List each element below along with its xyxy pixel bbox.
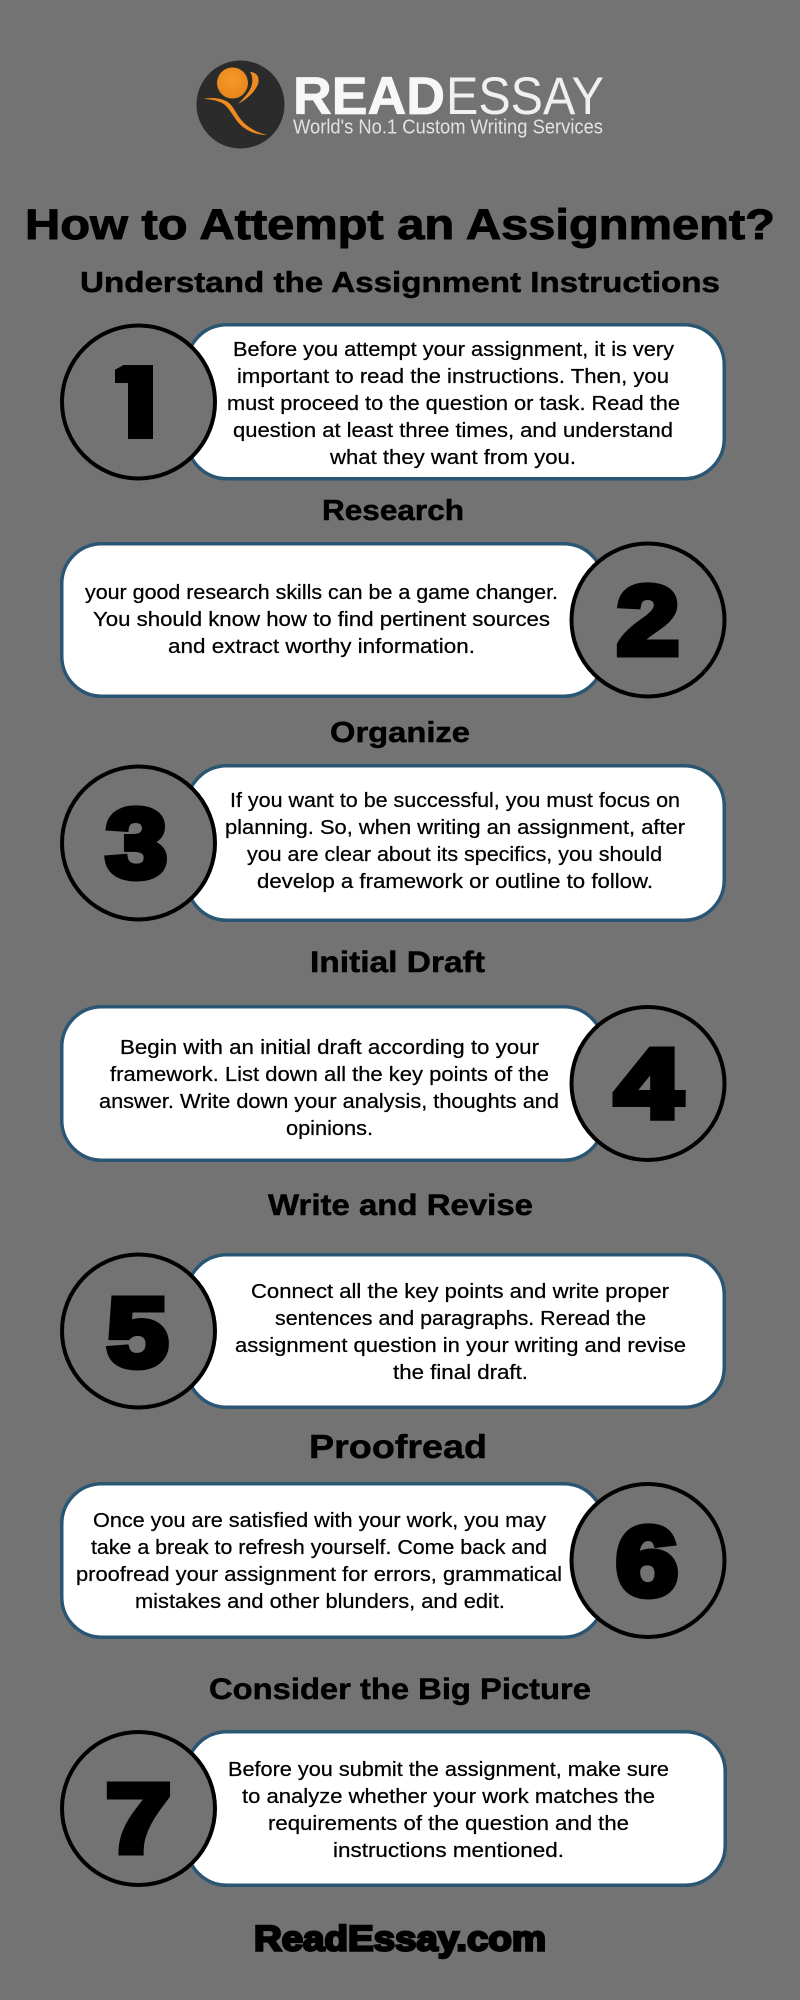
text panel 6: mistakes and other blunders, and edit.	[135, 1591, 505, 1613]
panel: step 3	[62, 766, 724, 920]
logo tagline: World's No.1 Custom Writing Services	[293, 116, 603, 138]
text panel 3: develop a framework or outline to follow.	[257, 871, 653, 893]
panel: step 6	[62, 1484, 724, 1637]
text panel 7: Before you submit the assignment, make sure	[228, 1759, 669, 1781]
logo wordmark: READ	[293, 67, 445, 126]
number badge 3: 3	[106, 789, 167, 898]
text panel 6: take a break to refresh yourself. Come back and	[91, 1537, 547, 1559]
text panel 2	[62, 544, 604, 696]
title: How to Attempt an Assignment?	[25, 201, 775, 249]
text panel 2: You should know how to find pertinent sources	[93, 609, 550, 631]
panel: step 5	[62, 1254, 724, 1408]
text panel 6	[62, 1484, 604, 1637]
number badge 2	[572, 544, 724, 696]
text panel 3: you are clear about its specifics, you should	[247, 844, 662, 866]
number badge 4: 4	[615, 1029, 682, 1138]
heading: step 2: Research	[322, 495, 464, 527]
number badge 5: 5	[107, 1278, 168, 1387]
text panel 1: must proceed to the question or task. Read the	[227, 393, 680, 415]
text panel 4: framework. List down all the key points of the	[110, 1064, 549, 1086]
text panel 2: and extract worthy information.	[168, 636, 475, 658]
text panel 5: Connect all the key points and write proper	[251, 1281, 669, 1303]
panel: step 4	[62, 1007, 724, 1160]
number badge 6: 6	[616, 1507, 678, 1616]
number badge 2: 2	[617, 566, 679, 675]
text panel 3: planning. So, when writing an assignment, after	[225, 817, 685, 839]
heading: step 1: Understand the Assignment Instructions	[80, 267, 720, 299]
panel: step 2	[62, 544, 724, 696]
text panel 1: what they want from you.	[329, 447, 576, 469]
text panel 6: Once you are satisfied with your work, you may	[93, 1510, 546, 1532]
heading: step 4: Initial Draft	[310, 946, 485, 979]
text panel 1: Before you attempt your assignment, it is very	[233, 339, 674, 361]
text panel 5: sentences and paragraphs. Reread the	[275, 1308, 646, 1330]
heading: step 6: Proofread	[309, 1428, 487, 1465]
text panel 7	[187, 1732, 725, 1885]
text panel 1: important to read the instructions. Then, you	[237, 366, 669, 388]
text panel 4: Begin with an initial draft according to your	[120, 1037, 539, 1059]
panel: step 7	[62, 1732, 725, 1885]
text panel 1: question at least three times, and understand	[233, 420, 673, 442]
heading: step 5: Write and Revise	[268, 1189, 533, 1222]
text panel 7: to analyze whether your work matches the	[242, 1786, 655, 1808]
icon: logo circle with orange figure	[196, 60, 284, 148]
number badge 5	[62, 1254, 215, 1408]
number badge 7: 7	[106, 1764, 171, 1873]
text panel 5: the final draft.	[393, 1362, 528, 1384]
logo wordmark: ESSAY	[446, 67, 604, 126]
text panel 3: If you want to be successful, you must focus on	[230, 790, 680, 812]
text panel 2: your good research skills can be a game changer.	[85, 582, 558, 604]
number badge 1: 1	[106, 348, 172, 457]
logo: ReadEssay	[196, 60, 604, 148]
panel: step 1	[62, 325, 724, 479]
number badge 7	[62, 1732, 215, 1885]
number badge 6	[572, 1484, 724, 1637]
text panel 5	[187, 1255, 724, 1407]
text panel 7: requirements of the question and the	[268, 1813, 629, 1835]
heading: step 3: Organize	[330, 717, 470, 749]
logo wordmark	[293, 67, 604, 126]
text panel 1	[187, 325, 724, 479]
text panel 3	[187, 766, 724, 920]
number badge 4	[572, 1007, 724, 1160]
text panel 7: instructions mentioned.	[333, 1840, 564, 1862]
text panel 5: assignment question in your writing and revise	[235, 1335, 686, 1357]
heading: step 7: Consider the Big Picture	[209, 1673, 591, 1706]
text panel 4	[62, 1007, 604, 1160]
text panel 4: opinions.	[286, 1118, 373, 1140]
text panel 4: answer. Write down your analysis, thoughts and	[99, 1091, 559, 1113]
number badge 3	[62, 766, 215, 920]
number badge 1	[62, 326, 215, 478]
footer: website: ReadEssay.com	[254, 1920, 546, 1958]
text panel 6: proofread your assignment for errors, grammatical	[76, 1564, 562, 1586]
